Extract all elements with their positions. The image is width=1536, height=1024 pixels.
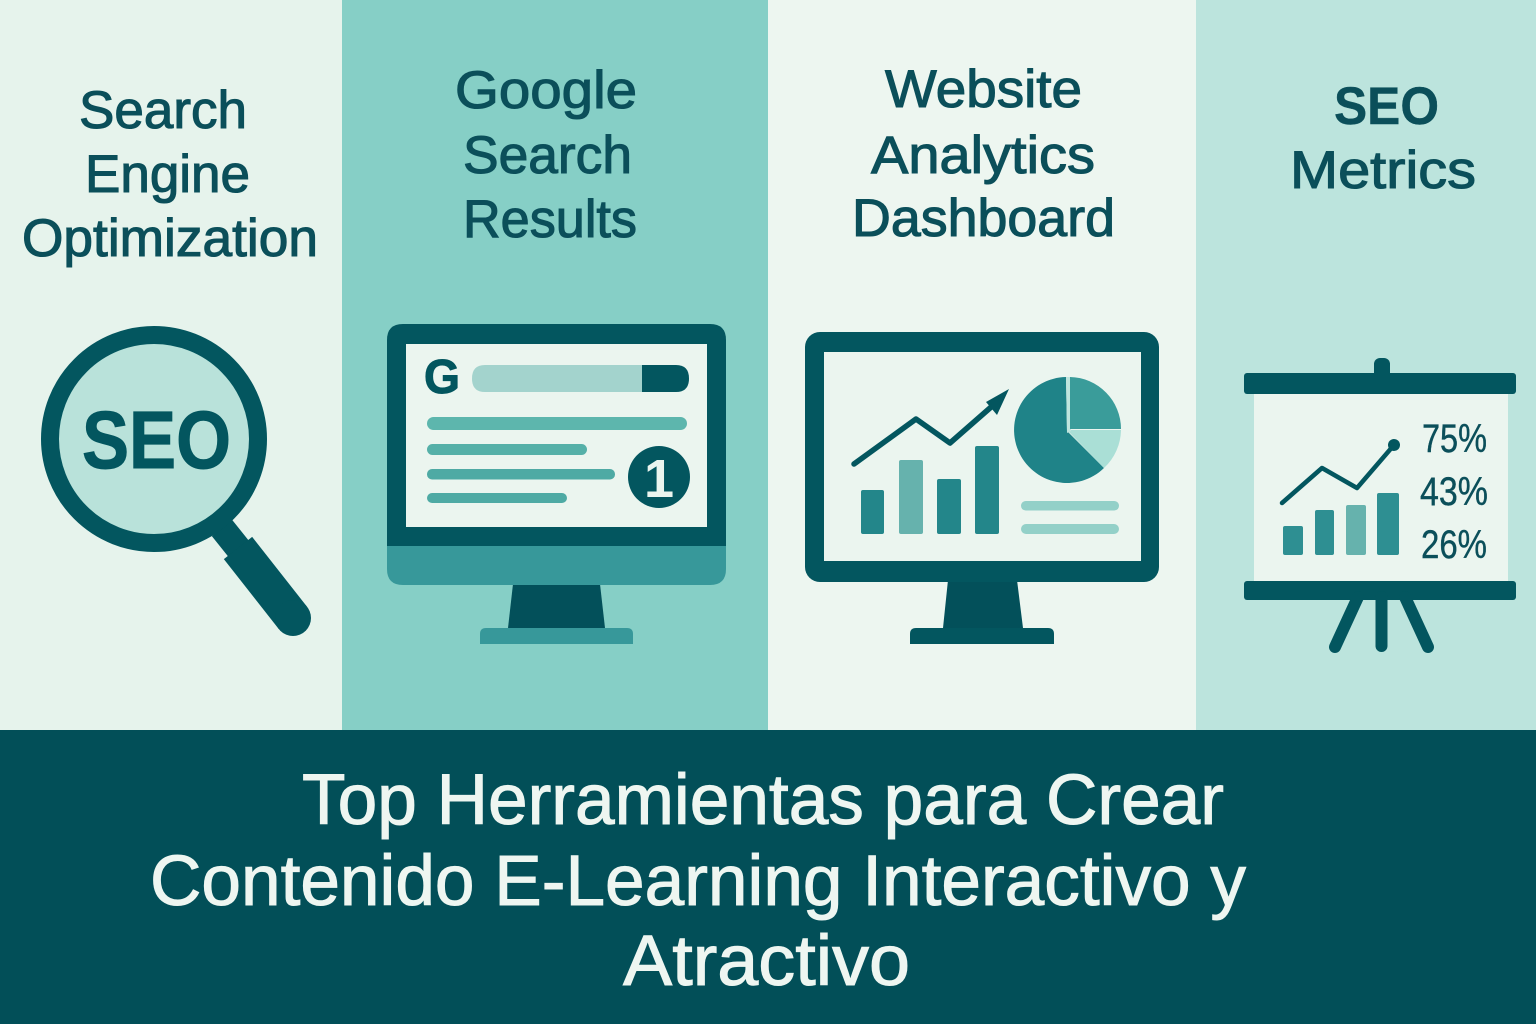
icon: magnifying glass with SEO: SEO: [82, 395, 231, 486]
icon: monitor with search results: G: [424, 351, 460, 404]
metric percentages: 43%: [1420, 470, 1488, 514]
metric percentages: 26%: [1421, 523, 1487, 567]
panel: website analytics dashboard: [768, 0, 1196, 730]
metric percentages: [1420, 417, 1488, 567]
heading: SEO metrics: [1290, 77, 1476, 200]
line chart: [1282, 439, 1400, 503]
heading: SEO metrics: Metrics: [1290, 141, 1476, 200]
heading: SEO metrics: SEO: [1334, 77, 1439, 136]
metric percentages: 75%: [1422, 417, 1487, 461]
heading: website analytics dashboard: Website: [885, 60, 1082, 119]
arrow: trend line: [854, 389, 1009, 464]
heading: google search results: Google: [455, 61, 637, 120]
heading: google search results: Results: [463, 190, 637, 249]
footer banner title: [0, 730, 1536, 1024]
footer banner title: Contenido E-Learning Interactivo y: [150, 842, 1246, 921]
panel: SEO metrics: [1196, 0, 1536, 730]
heading: google search results: [455, 61, 637, 249]
icon: monitor with analytics dashboard: [805, 332, 1159, 644]
heading: website analytics dashboard: Analytics: [871, 126, 1095, 185]
icon: presentation board with metrics: [1244, 358, 1516, 647]
footer banner title: Top Herramientas para Crear: [302, 761, 1224, 840]
bar chart: [861, 446, 999, 534]
pie chart: [1014, 377, 1121, 483]
icon: monitor with search results: 1: [644, 449, 674, 509]
stand legs: [1335, 597, 1428, 647]
icon: monitor with search results: [387, 324, 726, 644]
heading: search engine optimization: Optimization: [22, 209, 318, 268]
footer banner title: Atractivo: [623, 922, 910, 1001]
heading: search engine optimization: Engine: [85, 145, 250, 204]
heading: search engine optimization: Search: [79, 81, 247, 140]
panel: google search results: [342, 0, 768, 730]
icon: magnifying glass with SEO: [50, 335, 311, 636]
heading: website analytics dashboard: [852, 60, 1115, 248]
heading: search engine optimization: [22, 81, 318, 268]
heading: google search results: Search: [463, 126, 632, 185]
heading: website analytics dashboard: Dashboard: [852, 189, 1115, 248]
legend lines: [1021, 501, 1119, 534]
bar chart: [1283, 493, 1399, 555]
panel: search engine optimization: [0, 0, 342, 730]
